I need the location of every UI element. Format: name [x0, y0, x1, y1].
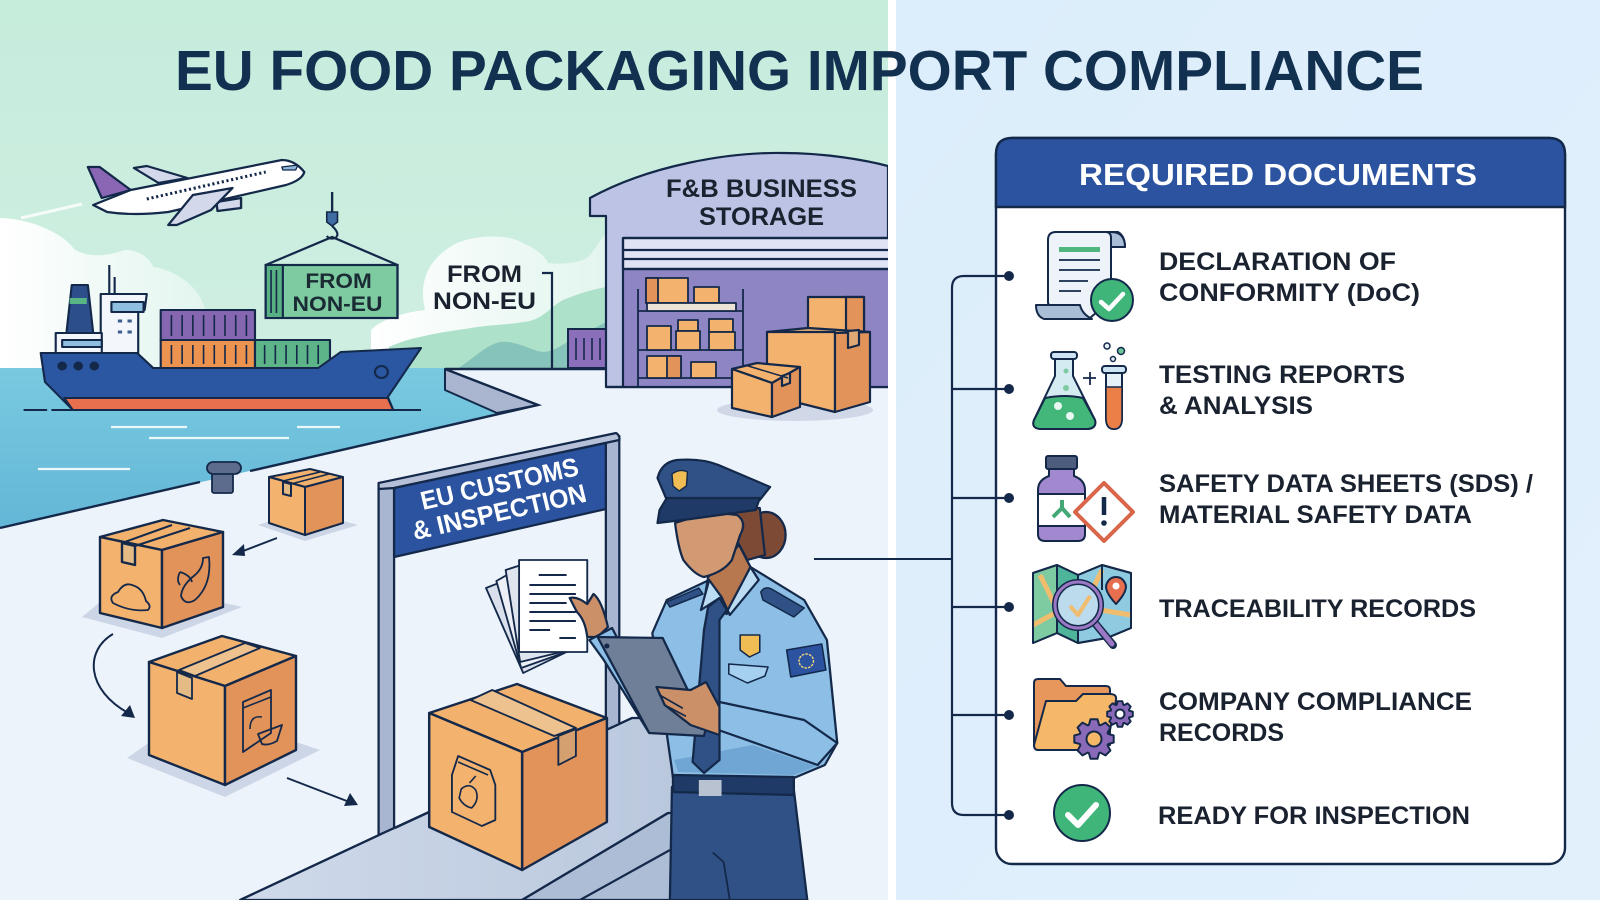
from non-eu label: FROM [447, 261, 522, 288]
card heading: REQUIRED DOCUMENTS [1079, 157, 1477, 192]
badge [740, 635, 760, 657]
container label: FROM [305, 269, 372, 293]
curved arrow [94, 634, 135, 718]
inspection counter [240, 718, 715, 900]
text: traceability records: TRACEABILITY RECORDS [1159, 595, 1476, 623]
text: safety data sheets [1159, 470, 1533, 529]
text: safety data sheets: SAFETY DATA SHEETS (SDS) / [1159, 470, 1533, 498]
customs officer [570, 460, 837, 900]
text: testing reports: TESTING REPORTS [1159, 361, 1405, 389]
text: testing reports: & ANALYSIS [1159, 392, 1313, 420]
icon: flask and test tube [1033, 343, 1126, 429]
collar [701, 567, 759, 615]
icon: map with magnifier [1033, 565, 1131, 645]
tablet [589, 628, 649, 733]
icon: green check [1054, 785, 1110, 841]
from non-eu label [434, 265, 534, 309]
customs parcel [429, 684, 607, 870]
warehouse box pile [717, 297, 873, 421]
card body [996, 138, 1565, 864]
text: company compliance records: RECORDS [1159, 719, 1284, 747]
banner [394, 443, 606, 557]
shelving with boxes [638, 278, 743, 388]
holding hand [570, 594, 608, 637]
tie [693, 598, 727, 773]
title: EU FOOD PACKAGING IMPORT COMPLIANCE [175, 39, 1424, 103]
warehouse: f&b business storage [590, 153, 898, 388]
harbour scene [0, 153, 898, 900]
arrow: small parcel to banana box [232, 538, 277, 556]
quay ground [0, 369, 888, 900]
neck [704, 545, 750, 614]
crane hook and hanging container [266, 192, 397, 318]
from non-eu bracket [542, 273, 552, 368]
banner text [414, 458, 586, 539]
warehouse label: STORAGE [699, 203, 824, 231]
text: declaration of conformity: DECLARATION OF [1159, 248, 1396, 276]
pocket [729, 664, 768, 683]
banner text: EU CUSTOMS [418, 452, 581, 516]
cap [658, 460, 770, 500]
right panel background [896, 0, 1600, 900]
containers [161, 310, 255, 340]
from non-eu label: NON-EU [433, 288, 536, 315]
large parcel [127, 636, 320, 797]
text: company compliance records [1159, 688, 1472, 747]
connector tree [952, 271, 1014, 820]
panel: required documents [952, 138, 1565, 864]
face [675, 512, 743, 577]
banner text: & INSPECTION [409, 478, 589, 546]
warehouse label: F&B BUSINESS [666, 175, 857, 203]
hills [389, 287, 606, 372]
warehouse label [668, 179, 856, 225]
parcel with food icons [82, 520, 242, 638]
text: testing reports [1159, 361, 1405, 420]
epaulettes [667, 588, 703, 607]
icon: declaration document [1036, 232, 1133, 321]
trousers [670, 787, 807, 900]
airplane trail [21, 204, 82, 218]
document stack [486, 560, 587, 673]
shirt [652, 567, 837, 778]
water [0, 368, 496, 527]
container label [294, 274, 382, 311]
hair bun [759, 510, 787, 560]
clouds [0, 218, 606, 372]
icon: chemical bottle and hazard [1038, 456, 1133, 541]
text: declaration of conformity: CONFORMITY (DoC) [1159, 279, 1420, 307]
belt [673, 775, 794, 795]
card header [996, 138, 1565, 207]
hull [41, 348, 421, 410]
customs gate [379, 433, 619, 835]
small parcel [258, 469, 358, 541]
airplane [88, 160, 304, 225]
arrow toward gate [287, 778, 358, 806]
eu flag patch [787, 644, 826, 677]
cargo ship [24, 265, 421, 410]
water ripples [38, 427, 340, 469]
connector from officer to documents [814, 558, 952, 560]
bollard [207, 462, 241, 493]
text: ready for inspection: READY FOR INSPECTION [1158, 802, 1470, 830]
small purple container [568, 329, 608, 368]
left panel background [0, 0, 888, 900]
tablet hand [656, 682, 719, 735]
icon: folder with gears [1034, 679, 1133, 759]
text: declaration of conformity [1159, 248, 1420, 307]
container label: NON-EU [292, 292, 382, 316]
text: company compliance records: COMPANY COMPLIANCE [1159, 688, 1472, 716]
sleeve [718, 702, 837, 765]
text: safety data sheets: MATERIAL SAFETY DATA [1159, 501, 1472, 529]
